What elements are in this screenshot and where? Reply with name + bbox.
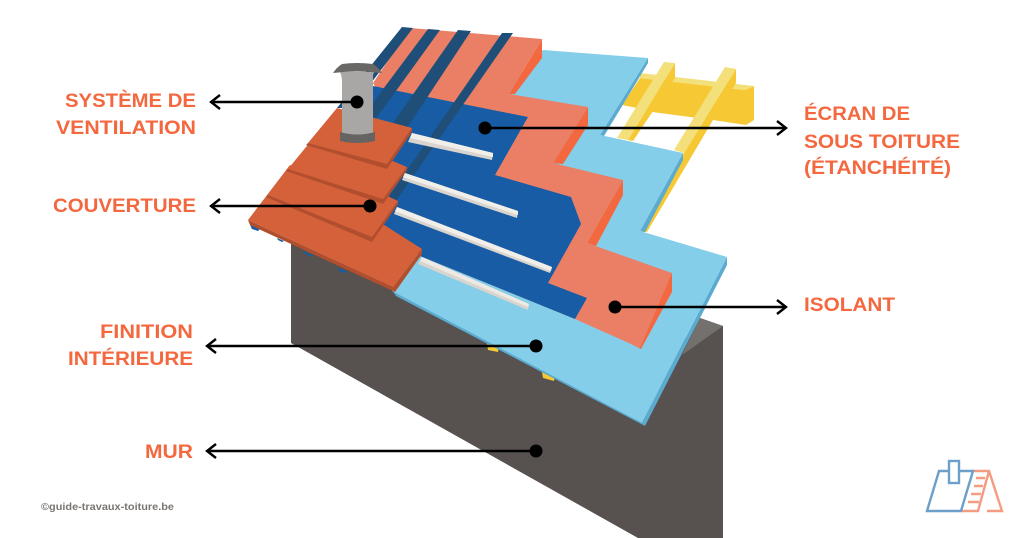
- label: ecran de sous toiture: ÉCRAN DE: [804, 103, 910, 125]
- underlay membrane light blue: [392, 50, 727, 426]
- label: finition interieure: INTÉRIEURE: [68, 348, 193, 370]
- wall: [291, 240, 723, 538]
- label: systeme de ventilation: SYSTÈME DE: [65, 90, 196, 112]
- arrow: ecran: [478, 121, 786, 135]
- label: finition interieure: [68, 322, 193, 370]
- white rails: [394, 133, 552, 310]
- label: ecran de sous toiture: SOUS TOITURE: [804, 132, 960, 153]
- insulation salmon: [373, 28, 672, 349]
- label: mur: MUR: [145, 442, 193, 463]
- deep blue interior layer: [330, 86, 587, 319]
- roof framing yellow: [617, 62, 754, 232]
- label: ecran de sous toiture: [804, 103, 960, 179]
- interior finish yellow tabs: [487, 343, 555, 381]
- icon: logo: [927, 461, 1002, 511]
- label: systeme de ventilation: VENTILATION: [56, 118, 196, 139]
- arrow: ventilation: [211, 95, 364, 109]
- arrow: couverture: [211, 199, 376, 213]
- icon: ventilation chimney: [333, 63, 382, 143]
- label: finition interieure: FINITION: [100, 322, 193, 343]
- arrow: finition: [207, 339, 542, 353]
- battens: [337, 27, 513, 205]
- label: isolant: ISOLANT: [804, 295, 895, 316]
- copyright: ©guide-travaux-toiture.be: [41, 501, 174, 513]
- label: systeme de ventilation: [56, 90, 196, 139]
- arrow: mur: [207, 444, 542, 458]
- roof tiles: [248, 108, 422, 292]
- small blue tabs under tiles: [250, 225, 348, 273]
- label: ecran de sous toiture: (ÉTANCHÉITÉ): [804, 157, 951, 179]
- label: couverture: COUVERTURE: [53, 196, 196, 217]
- arrow: isolant: [608, 300, 786, 314]
